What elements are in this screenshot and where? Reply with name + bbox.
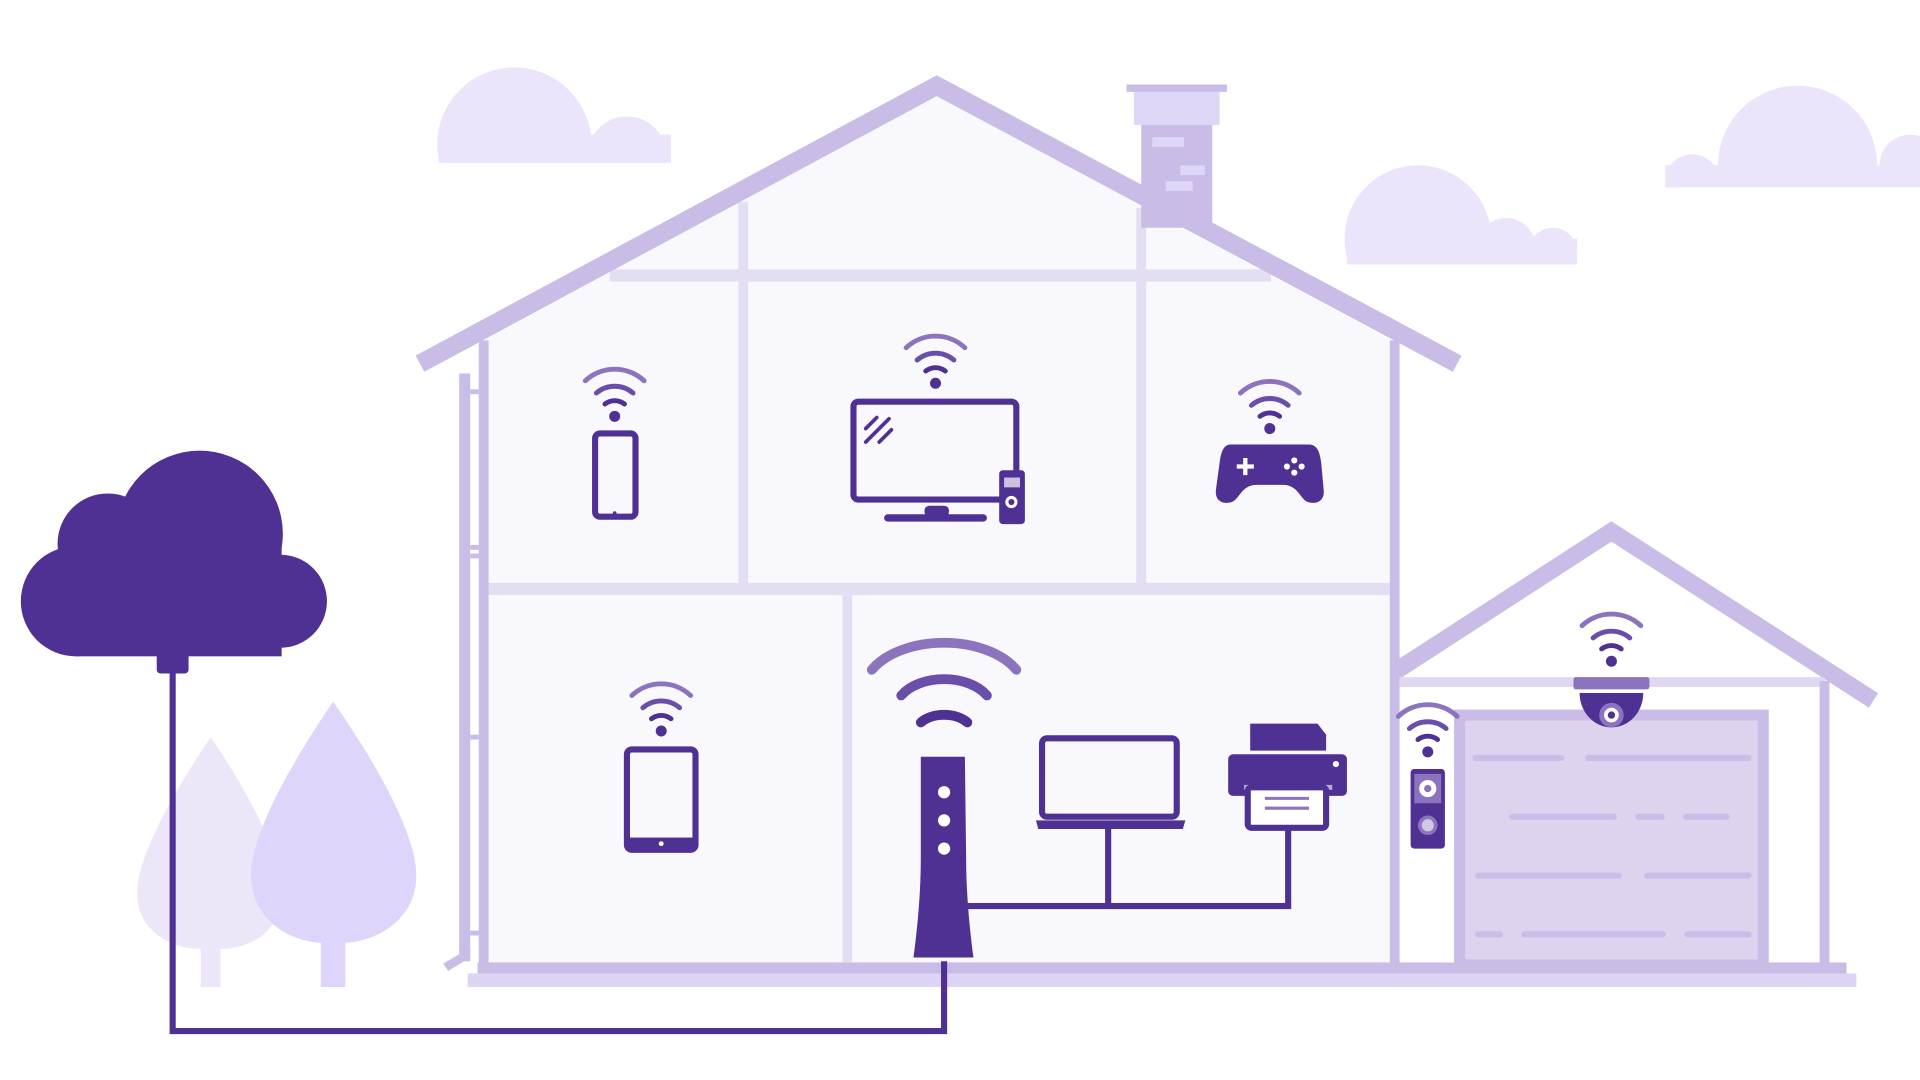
cable: cloud to router — [173, 671, 944, 1031]
device: laptop — [1036, 738, 1185, 829]
device: tablet — [627, 684, 696, 850]
device: tv — [853, 336, 1025, 524]
cloud: internet (dark) — [21, 451, 327, 673]
interior walls — [489, 202, 1390, 962]
trees — [137, 702, 416, 987]
device: security camera — [1573, 614, 1649, 727]
garage — [1396, 531, 1873, 965]
chimney — [1127, 84, 1227, 228]
cloud: far right — [1665, 86, 1920, 188]
roof — [420, 86, 1457, 364]
device: doorbell — [1398, 705, 1457, 849]
cables: router to laptop and printer — [967, 827, 1288, 906]
cloud: middle right — [1344, 165, 1578, 264]
garage door — [1460, 715, 1763, 965]
outer walls — [443, 340, 1400, 971]
cloud: top left — [437, 68, 671, 163]
device: printer — [1228, 724, 1347, 828]
device: router — [872, 643, 1016, 958]
house interior — [480, 96, 1822, 967]
device: game controller — [1216, 381, 1324, 503]
device: phone — [585, 369, 644, 517]
floor — [478, 962, 1847, 973]
